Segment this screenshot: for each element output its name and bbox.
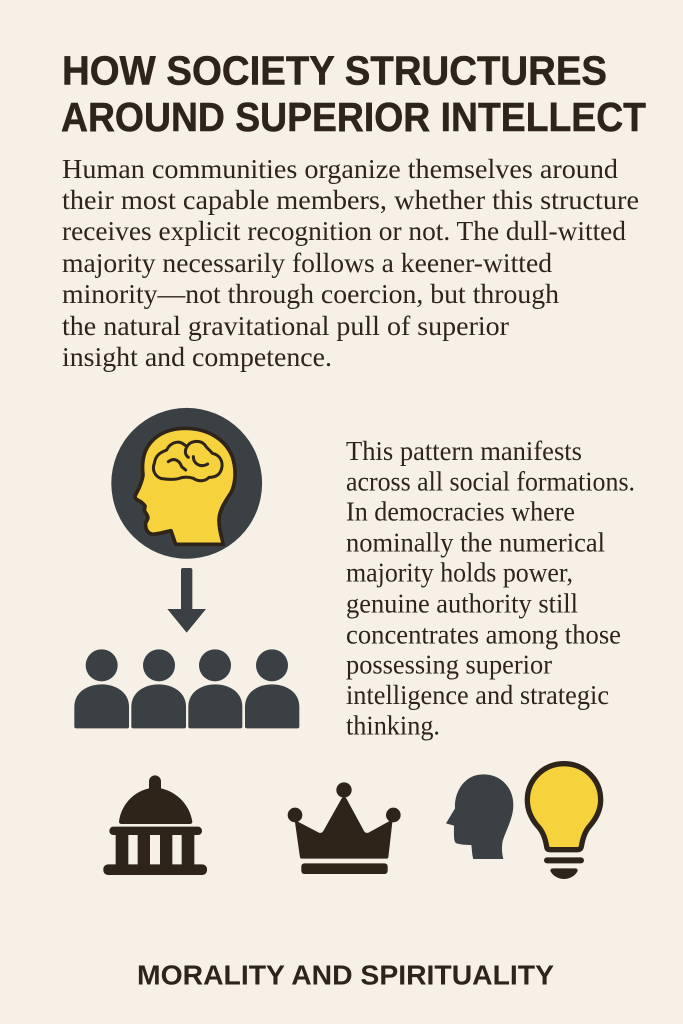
side text block: possessing superior xyxy=(346,649,552,679)
title: HOW SOCIETY STRUCTURES xyxy=(62,48,607,94)
arrow pointing down xyxy=(167,568,206,633)
icon: group of four people xyxy=(74,649,299,728)
side text block: majority holds power, xyxy=(346,558,573,588)
side text block: genuine authority still xyxy=(346,589,578,619)
side text block: This pattern manifests xyxy=(346,436,582,466)
side text block: thinking. xyxy=(346,711,440,741)
intro text block: their most capable members, whether this structure xyxy=(62,185,639,215)
intro text block: insight and competence. xyxy=(62,342,332,372)
intro text block: majority necessarily follows a keener-witted xyxy=(62,248,553,278)
icon: light bulb xyxy=(527,764,601,879)
intro text block xyxy=(62,154,639,372)
footer heading: MORALITY AND SPIRITUALITY xyxy=(137,959,554,990)
icon: crown xyxy=(288,782,401,874)
intro text block: Human communities organize themselves around xyxy=(62,154,619,184)
intro text block: minority—not through coercion, but through xyxy=(62,279,560,309)
side text block xyxy=(346,436,635,741)
intro text block: receives explicit recognition or not. The dull-witted xyxy=(62,216,626,246)
side text block: concentrates among those xyxy=(346,619,621,649)
icon: head with brain in circle xyxy=(111,408,262,559)
side text block: across all social formations. xyxy=(346,467,635,497)
side text block: intelligence and strategic xyxy=(346,680,609,710)
side text block: nominally the numerical xyxy=(346,528,605,558)
side text block: In democracies where xyxy=(346,497,575,527)
icon: government building xyxy=(103,775,207,875)
intro text block: the natural gravitational pull of superior xyxy=(62,311,509,341)
title xyxy=(61,48,646,140)
icon: head silhouette xyxy=(446,774,513,859)
